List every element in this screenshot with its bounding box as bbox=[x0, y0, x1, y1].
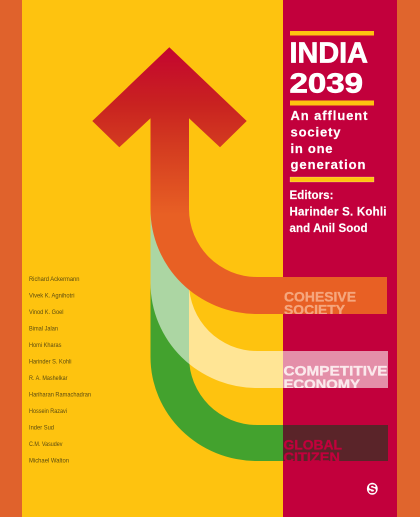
label: global citizen bbox=[284, 440, 342, 461]
subtitle: society bbox=[290, 124, 341, 140]
icon: publisher logo bbox=[367, 483, 378, 496]
contributor names: R. A. Mashelkar bbox=[29, 375, 68, 382]
contributor names: Michael Walton bbox=[29, 458, 69, 465]
contributor names: Hossein Razavi bbox=[29, 408, 67, 415]
arrow with orange band: cohesive society bbox=[92, 47, 387, 314]
contributor names: Homi Kharas bbox=[29, 342, 62, 349]
label: cohesive society: SOCIETY bbox=[284, 302, 346, 318]
left orange stripe bbox=[0, 0, 22, 517]
icon: publisher logo: S bbox=[368, 484, 376, 496]
contributor names: Richard Ackermann bbox=[29, 276, 80, 283]
contributor names: Hariharan Ramachadran bbox=[29, 392, 91, 399]
contributor names: Vinod K. Goel bbox=[29, 309, 64, 316]
label: global citizen: GLOBAL bbox=[284, 436, 342, 452]
editors: Harinder S. Kohli bbox=[290, 206, 386, 218]
contributor names: Harinder S. Kohli bbox=[29, 359, 72, 366]
green band: global citizen bbox=[150, 200, 388, 461]
label: cohesive society: COHESIVE bbox=[284, 289, 356, 305]
crimson panel bbox=[283, 0, 397, 517]
contributor names bbox=[29, 276, 91, 465]
contributor names: Inder Sud bbox=[29, 425, 54, 432]
title block: INDIA bbox=[290, 38, 368, 70]
contributor names: Bimal Jalan bbox=[29, 326, 58, 333]
subtitle: An affluent bbox=[290, 108, 368, 123]
subtitle: generation bbox=[290, 157, 366, 172]
subtitle bbox=[290, 108, 374, 182]
editors bbox=[290, 190, 386, 235]
label: competitive economy: ECONOMY bbox=[284, 376, 361, 392]
label: cohesive society bbox=[284, 292, 356, 314]
contributor names: Vivek K. Agnihotri bbox=[29, 293, 75, 300]
label: competitive economy bbox=[284, 366, 388, 388]
right orange stripe bbox=[397, 0, 420, 517]
editors: Editors: bbox=[290, 190, 334, 202]
title block: 2039 bbox=[290, 68, 363, 99]
label: competitive economy: COMPETITIVE bbox=[284, 362, 388, 378]
label: global citizen: CITIZEN bbox=[284, 449, 340, 465]
editors: and Anil Sood bbox=[290, 223, 368, 235]
subtitle: in one bbox=[290, 141, 332, 156]
title block bbox=[290, 31, 374, 106]
pale band: competitive economy bbox=[150, 200, 388, 388]
contributor names: C.M. Vasudev bbox=[29, 441, 63, 448]
